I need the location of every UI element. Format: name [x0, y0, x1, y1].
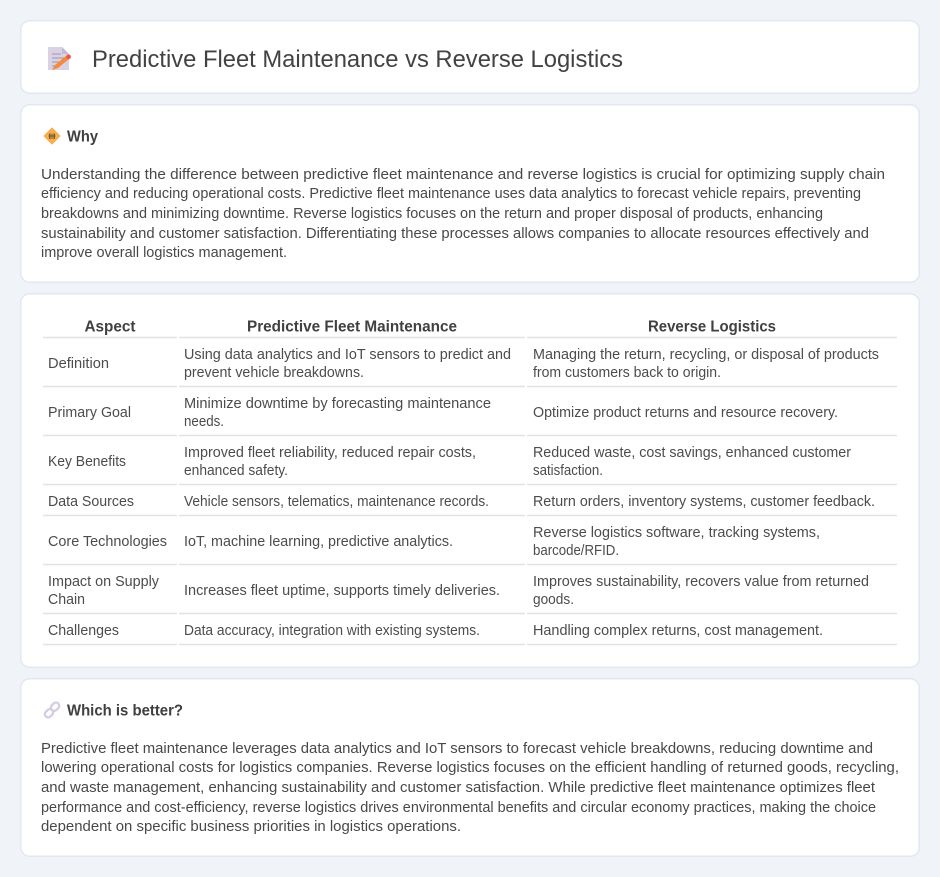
row: key benefits: Reduced waste, cost savings, enhanced customer [533, 445, 851, 461]
row: data sources: Vehicle sensors, telematics, maintenance records. [184, 494, 489, 510]
row: data sources: Data Sources [48, 494, 134, 510]
text block: why explanation: sustainability and customer satisfaction. Differentiating these processes allows companies to allocate resources effectively and [41, 226, 869, 242]
row: primary goal: Minimize downtime by forecasting maintenance [184, 396, 491, 412]
heading: why: Why [67, 128, 98, 146]
icon: warning diamond [44, 128, 60, 144]
text block: which is better explanation: performance and cost-efficiency, reverse logistics drives environmental benefits and circular economy practices, making the choice [41, 800, 876, 816]
text block: why explanation: efficiency and reducing operational costs. Predictive fleet maintenance uses data analytics to forecast vehicle repairs, preventing [41, 186, 861, 202]
row: primary goal: needs. [184, 414, 224, 430]
row: key benefits: Improved fleet reliability, reduced repair costs, [184, 445, 476, 461]
icon: document with pencil [48, 47, 71, 70]
row: definition: Definition [48, 356, 109, 372]
title: Predictive Fleet Maintenance vs Reverse Logistics [92, 46, 623, 73]
row: definition: from customers back to origin. [533, 365, 721, 381]
text block: why explanation: improve overall logistics management. [41, 245, 287, 261]
row: impact on supply chain: goods. [533, 592, 574, 608]
text block: which is better explanation: lowering operational costs for logistics companies. Reverse logistics focuses on the efficient handling of returned goods, recycling, [41, 760, 899, 776]
table header row: Aspect [84, 318, 136, 336]
text block: why explanation: breakdowns and minimizing downtime. Reverse logistics focuses on the return and proper disposal of products, enhancing [41, 206, 823, 222]
row: primary goal: Optimize product returns and resource recovery. [533, 405, 838, 421]
row: core technologies: barcode/RFID. [533, 543, 619, 559]
row: impact on supply chain: Improves sustainability, recovers value from returned [533, 574, 869, 590]
row: challenges: Data accuracy, integration with existing systems. [184, 623, 480, 639]
table header row [43, 318, 897, 338]
row: impact on supply chain [43, 574, 897, 614]
row: data sources: Return orders, inventory systems, customer feedback. [533, 494, 875, 510]
table header row: Reverse Logistics [648, 318, 776, 336]
row: core technologies: Core Technologies [48, 534, 167, 550]
row: core technologies: IoT, machine learning, predictive analytics. [184, 534, 453, 550]
row: key benefits [43, 445, 897, 484]
row: core technologies: Reverse logistics software, tracking systems, [533, 525, 820, 541]
row: primary goal: Primary Goal [48, 405, 131, 421]
row: data sources [43, 494, 897, 516]
row: key benefits: satisfaction. [533, 463, 603, 479]
row: impact on supply chain: Impact on Supply [48, 574, 160, 590]
row: definition [43, 347, 897, 386]
table header row: Predictive Fleet Maintenance [247, 318, 457, 336]
row: challenges: Handling complex returns, cost management. [533, 623, 823, 639]
row: challenges [43, 623, 897, 644]
row: definition: prevent vehicle breakdowns. [184, 365, 364, 381]
panel: comparison table [21, 294, 919, 667]
row: challenges: Challenges [48, 623, 119, 639]
icon: link [44, 701, 61, 719]
text block: which is better explanation: and waste management, enhancing sustainability and customer satisfaction. While predictive fleet maintenance optimizes fleet [41, 780, 875, 796]
text block: why explanation: Understanding the difference between predictive fleet maintenance and reverse logistics is crucial for optimizing supply chain [41, 167, 885, 183]
panel: header [21, 21, 919, 93]
row: key benefits: Key Benefits [48, 454, 126, 470]
panel: why [21, 105, 919, 282]
text block: which is better explanation: dependent on specific business priorities in logistics operations. [41, 819, 461, 835]
panel: which is better [21, 679, 919, 856]
row: impact on supply chain: Increases fleet uptime, supports timely deliveries. [184, 583, 500, 599]
heading: which is better: Which is better? [67, 702, 183, 720]
text block: which is better explanation [41, 741, 899, 835]
row: definition: Using data analytics and IoT sensors to predict and [184, 347, 511, 363]
row: primary goal [43, 396, 897, 436]
row: impact on supply chain: Chain [48, 592, 85, 608]
row: definition: Managing the return, recycling, or disposal of products [533, 347, 879, 363]
text block: which is better explanation: Predictive fleet maintenance leverages data analytics and IoT sensors to forecast vehicle breakdowns, reducing downtime and [41, 741, 873, 757]
row: key benefits: enhanced safety. [184, 463, 288, 479]
row: core technologies [43, 525, 897, 564]
text block: why explanation [41, 167, 885, 261]
